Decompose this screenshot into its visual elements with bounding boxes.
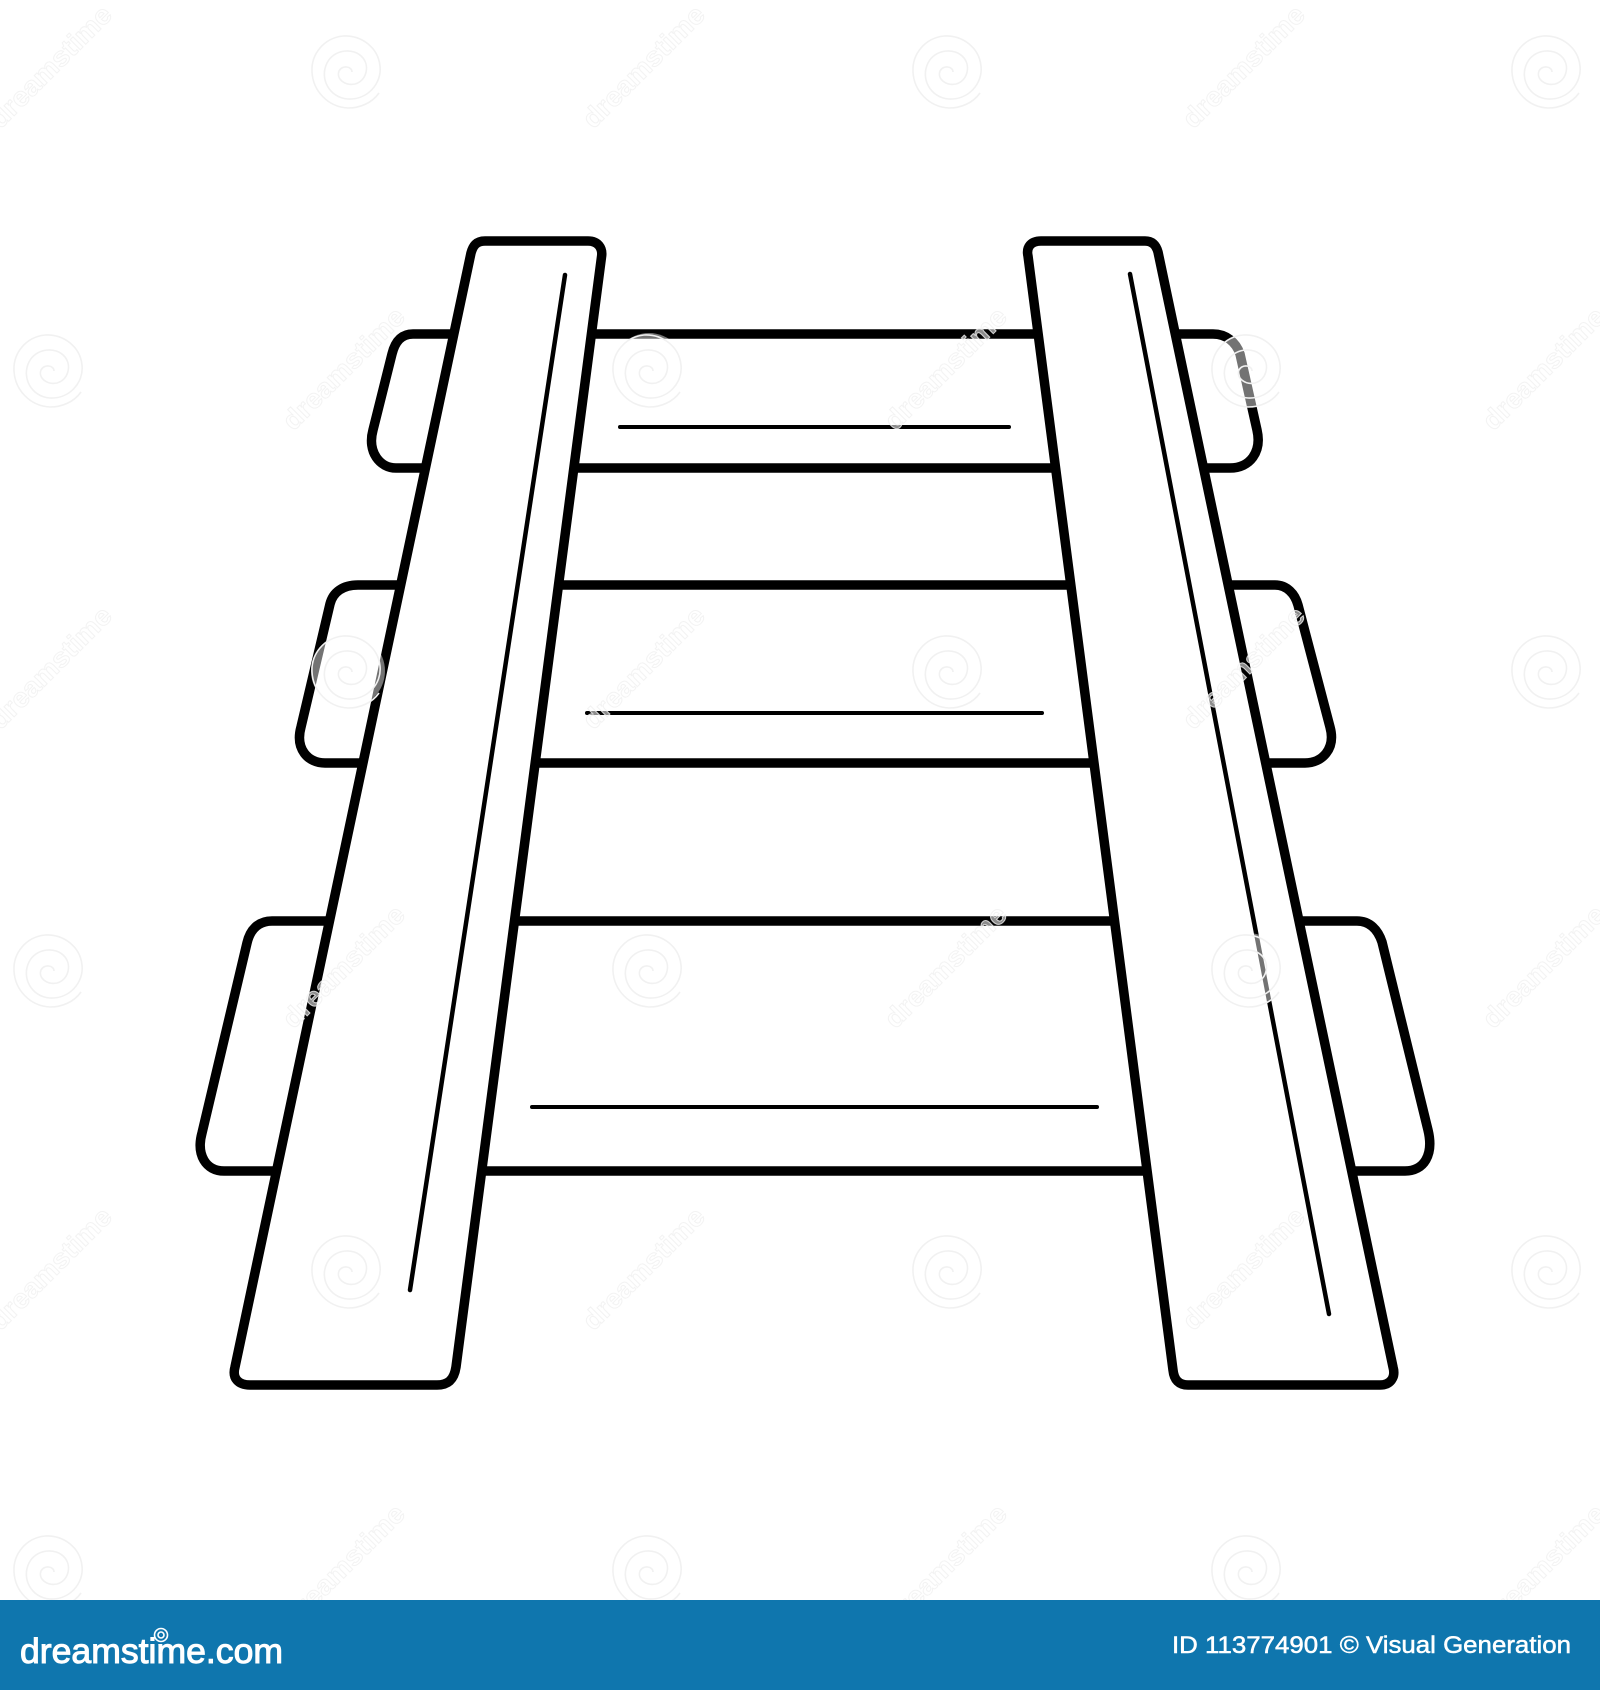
sleeper: top	[372, 334, 1258, 468]
right rail highlight	[1130, 274, 1329, 1314]
logo wordmark: dreamstime.com	[20, 1632, 283, 1671]
watermark: diagonal wordmarks: dreamstime	[576, 1201, 711, 1336]
sleeper: bottom	[200, 921, 1430, 1171]
right rail	[1028, 241, 1394, 1385]
image credit: ID 113774901 © Visual Generation	[1172, 1632, 1571, 1659]
left rail highlight	[410, 275, 565, 1290]
watermark: diagonal wordmarks: dreamstime	[276, 1498, 411, 1633]
footer banner	[0, 1600, 1600, 1690]
watermark: diagonal wordmarks: dreamstime	[576, 600, 711, 735]
watermark: diagonal wordmarks: dreamstime	[878, 1498, 1013, 1633]
watermark: diagonal wordmarks: dreamstime	[1176, 1201, 1311, 1336]
watermark: diagonal wordmarks: dreamstime	[1176, 0, 1311, 134]
sleeper highlight lines	[532, 427, 1097, 1107]
sleeper: middle	[300, 585, 1331, 763]
watermark: diagonal wordmarks: dreamstime	[1176, 600, 1311, 735]
watermark: diagonal wordmarks: dreamstime	[878, 899, 1013, 1034]
icon: logo spiral	[154, 1628, 168, 1642]
watermark: diagonal wordmarks: dreamstime	[276, 301, 411, 436]
watermark: diagonal wordmarks: dreamstime	[878, 301, 1013, 436]
watermark: diagonal wordmarks: dreamstime	[276, 899, 411, 1034]
watermark: diagonal wordmarks: dreamstime	[576, 0, 711, 134]
left rail	[234, 241, 602, 1385]
railway track icon	[200, 241, 1430, 1385]
